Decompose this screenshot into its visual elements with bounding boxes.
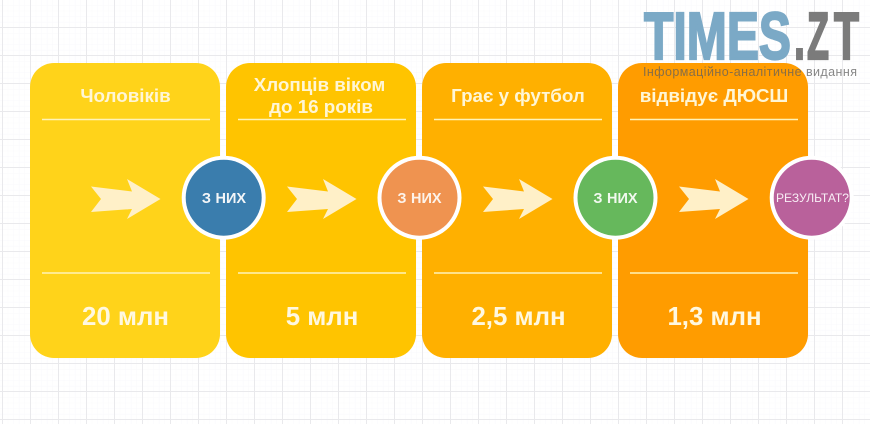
circle: результат: РЕЗУЛЬТАТ? xyxy=(776,191,849,205)
heading: Хлопців віком до 16 років: до 16 років xyxy=(269,96,373,117)
heading: відвідує ДЮСШ: відвідує ДЮСШ xyxy=(640,85,788,106)
heading: Грає у футбол: Грає у футбол xyxy=(451,85,585,106)
circle: результат xyxy=(770,156,854,240)
value: 5 млн: 5 млн xyxy=(286,303,358,331)
arrow 1 xyxy=(91,179,160,219)
circle: з них (orange) xyxy=(378,156,462,240)
panel: Грає у футбол xyxy=(422,63,612,358)
circle: з них (green): З НИХ xyxy=(593,191,638,207)
circle: з них (blue): З НИХ xyxy=(202,191,246,207)
panel: Хлопців віком до 16 років xyxy=(226,63,416,358)
value: 2,5 млн: 2,5 млн xyxy=(471,303,566,331)
circle: з них (green) xyxy=(574,156,658,240)
logo subtitle: Інформаційно-аналітичне видання xyxy=(643,65,857,79)
heading: Хлопців віком до 16 років: Хлопців віком xyxy=(254,74,385,95)
circle: з них (blue) xyxy=(182,156,266,240)
circle: з них (orange): З НИХ xyxy=(397,191,442,207)
logo: TIMES.ZT: Z xyxy=(807,0,829,74)
logo: TIMES.ZT: TIMES xyxy=(644,0,791,74)
value: 1,3 млн: 1,3 млн xyxy=(667,303,762,331)
panel: відвідує ДЮСШ xyxy=(618,63,808,358)
panel: Чоловіків xyxy=(30,63,220,358)
arrow 3 xyxy=(483,179,552,219)
arrow 2 xyxy=(287,179,356,219)
heading: Чоловіків: Чоловіків xyxy=(80,85,171,106)
arrow 4 xyxy=(679,179,748,219)
logo: TIMES.ZT: . xyxy=(794,0,805,74)
value: 20 млн: 20 млн xyxy=(82,303,169,331)
